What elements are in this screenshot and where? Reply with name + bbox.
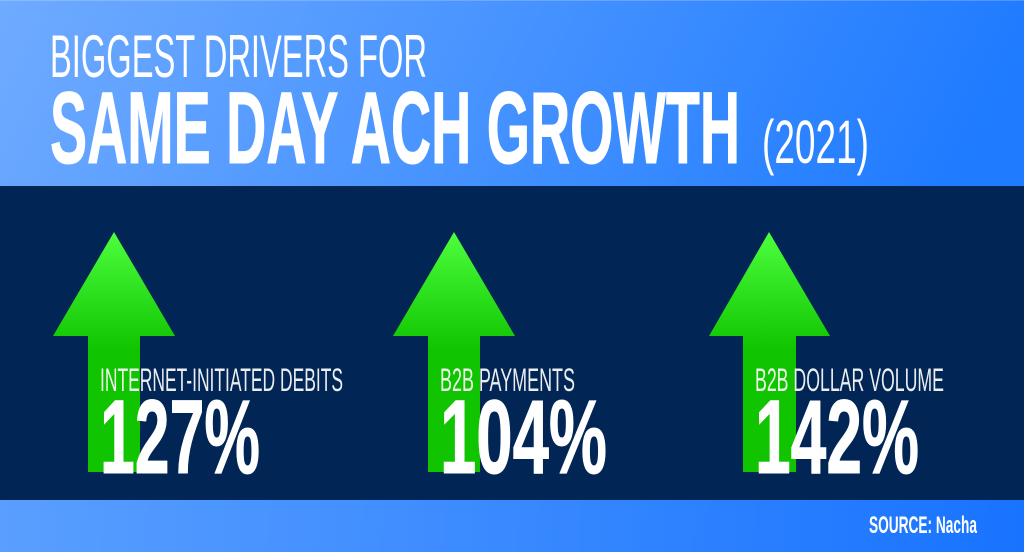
title xyxy=(50,23,869,185)
title line 1: BIGGEST DRIVERS FOR xyxy=(50,23,427,90)
icon: green up arrow xyxy=(53,232,175,472)
stat label: INTERNET-INITIATED DEBITS xyxy=(100,362,343,398)
main navy panel xyxy=(0,186,1024,500)
stat value: 104% xyxy=(440,379,607,496)
stat: internet-initiated debits xyxy=(53,232,343,496)
stat value: 127% xyxy=(100,379,260,496)
header band xyxy=(0,0,1024,186)
stat value: 142% xyxy=(755,379,919,496)
icon: green up arrow xyxy=(393,232,515,472)
stat: B2B dollar volume xyxy=(709,232,944,496)
title year: (2021) xyxy=(762,108,869,176)
icon: green up arrow xyxy=(709,232,830,472)
stat: B2B payments xyxy=(393,232,607,496)
footer band xyxy=(0,500,1024,552)
stat label: B2B PAYMENTS xyxy=(440,362,575,398)
